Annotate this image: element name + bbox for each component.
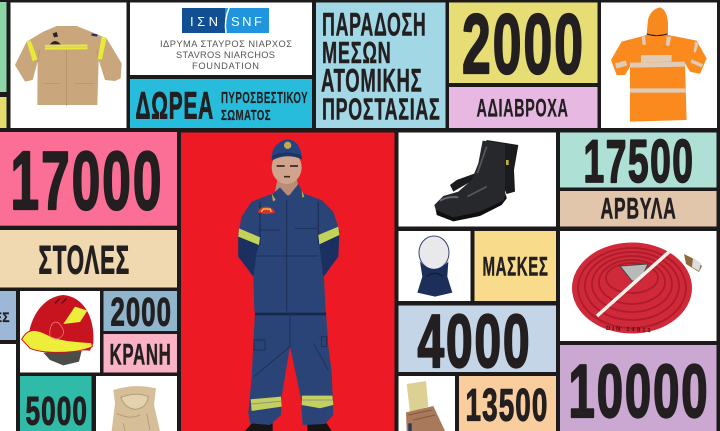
text: foundation name: STAVROS NIARCHOS xyxy=(176,50,275,60)
logo: SNF badge: ΙΣΝ xyxy=(190,14,218,29)
icon: red helmet xyxy=(22,295,93,365)
panel: delivery heading: ΜΕΣΩΝ xyxy=(322,35,392,70)
panel: 2000 raincoats number xyxy=(449,0,598,91)
panel: masks label: ΜΑΣΚΕΣ xyxy=(482,252,548,282)
panel: fire hose photo xyxy=(560,231,716,341)
panel: delivery heading: ΠΑΡΑΔΟΣΗ xyxy=(322,6,426,42)
panel: uniforms label xyxy=(0,230,177,288)
icon: orange raincoat xyxy=(611,7,707,122)
panel: 2000 helmets number: 2000 xyxy=(110,290,172,334)
panel: masks label xyxy=(474,231,556,301)
panel: 2000 helmets number xyxy=(104,290,177,334)
panel: yellow edge xyxy=(0,97,6,128)
panel: boots label xyxy=(560,191,716,226)
panel: 13500 number: 13500 xyxy=(466,380,548,430)
panel: 17000 uniforms number xyxy=(0,132,177,227)
panel: donation heading: ΠΥΡΟΣΒΕΣΤΙΚΟΥ xyxy=(221,90,308,107)
panel: donation heading xyxy=(130,79,312,128)
panel: helmet photo xyxy=(20,291,100,372)
logo: SNF badge xyxy=(182,8,269,33)
panel: 17000 uniforms number: 17000 xyxy=(10,134,164,227)
panel: cropped photo xyxy=(0,344,16,431)
panel: delivery heading xyxy=(316,2,446,128)
panel: 4000 number: 4000 xyxy=(418,299,532,383)
text: foundation name xyxy=(160,39,292,71)
panel: helmets label: ΚΡΑΝΗ xyxy=(110,339,172,372)
panel: delivery heading: ΠΡΟΣΤΑΣΙΑΣ xyxy=(322,92,440,126)
panel: donation heading: ΔΩΡΕΑ xyxy=(136,85,214,127)
icon: firefighter in uniform xyxy=(238,139,339,431)
icon: red hose: DIN 14811 xyxy=(606,326,651,334)
panel: firefighter on red xyxy=(181,132,394,431)
panel: glove photo xyxy=(398,376,455,431)
panel: cropped label xyxy=(0,291,16,340)
icon: navy mask xyxy=(417,236,452,297)
panel: green edge xyxy=(0,2,6,92)
panel: 5000 number xyxy=(20,376,92,431)
icon: red hose xyxy=(572,242,702,334)
text: foundation name: ΙΔΡΥΜΑ ΣΤΑΥΡΟΣ ΝΙΑΡΧΟΣ xyxy=(160,39,292,49)
panel: tan jacket photo xyxy=(10,2,126,128)
icon: glove xyxy=(406,381,445,431)
panel: boots photo xyxy=(398,132,556,226)
panel: raincoat photo xyxy=(601,2,717,128)
panel: balaclava photo xyxy=(96,376,177,431)
panel: helmets label xyxy=(104,334,177,372)
logo: SNF badge: SNF xyxy=(231,14,262,29)
panel: mask photo xyxy=(398,231,470,301)
panel: donation heading: ΣΩΜΑΤΟΣ xyxy=(221,107,271,124)
panel: 4000 number xyxy=(398,299,556,383)
icon: black boots xyxy=(434,140,518,221)
icon: tan balaclava xyxy=(112,386,160,431)
icon: tan jacket xyxy=(15,26,122,106)
panel: foundation logo xyxy=(130,2,312,75)
text: foundation name: FOUNDATION xyxy=(192,61,259,71)
panel: raincoats label: ΑΔΙΑΒΡΟΧΑ xyxy=(476,95,568,123)
panel: 13500 number xyxy=(459,376,556,431)
panel: delivery heading: ΑΤΟΜΙΚΗΣ xyxy=(321,62,422,98)
panel: uniforms label: ΣΤΟΛΕΣ xyxy=(38,238,130,282)
panel: raincoats label xyxy=(449,87,598,128)
